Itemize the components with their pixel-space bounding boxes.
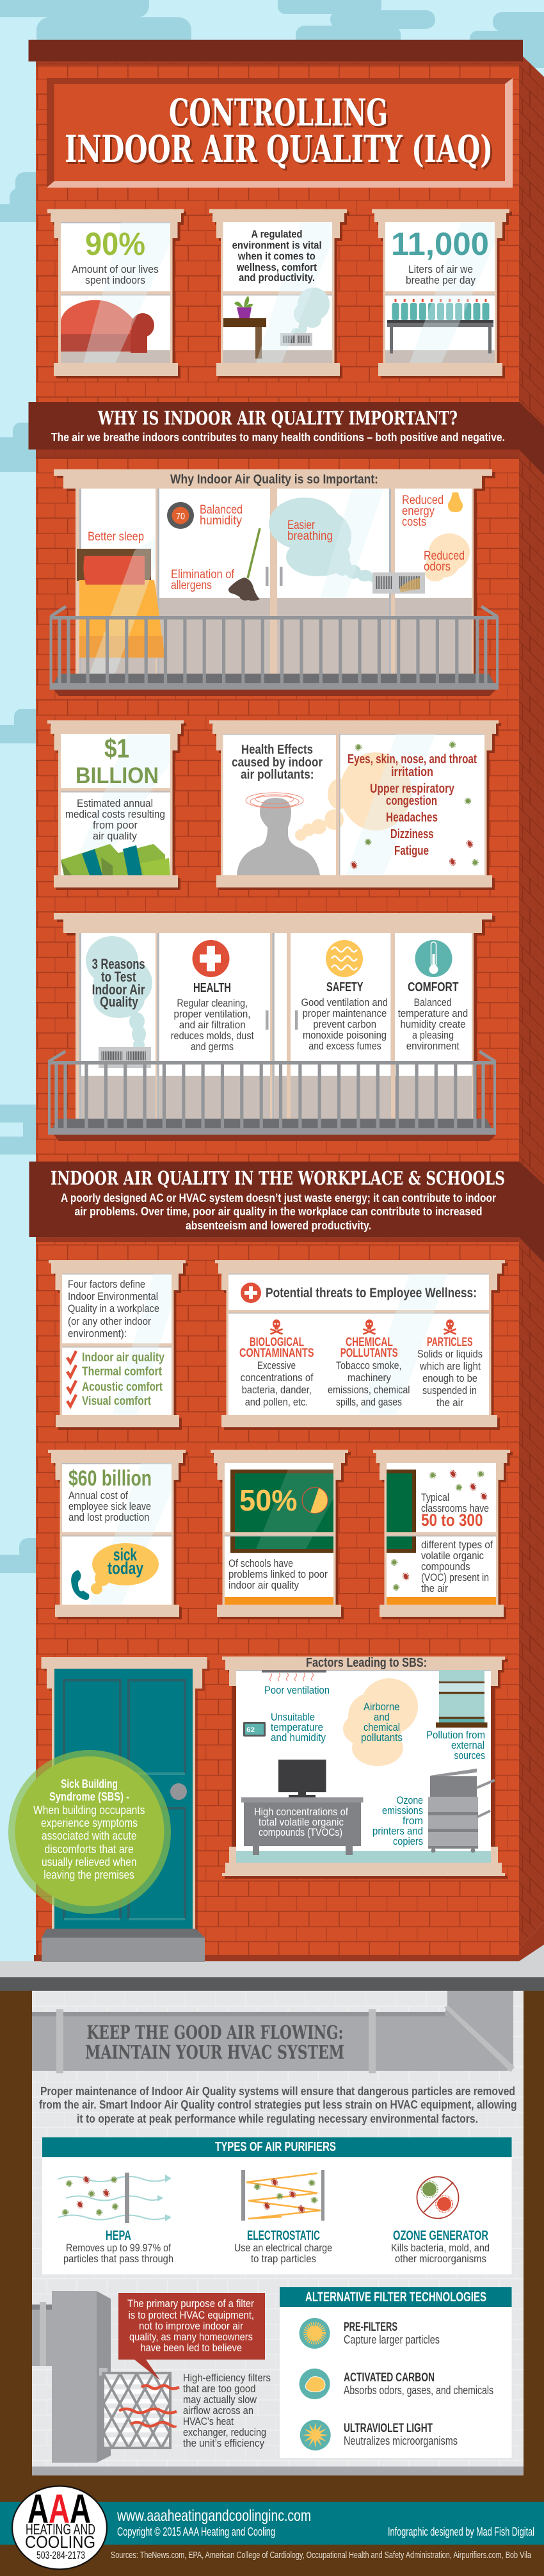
footer band [0, 2502, 544, 2545]
logo: AAA heating and cooling: HEATING AND [26, 2521, 95, 2538]
icon: vent [372, 572, 425, 594]
text: ozone emissions: emissions [382, 1804, 423, 1817]
column: safety: prevent carbon [313, 1018, 376, 1030]
icon: bottles on table [387, 299, 493, 353]
text: easier breathing: breathing [287, 530, 333, 543]
text: typical classrooms [421, 1491, 493, 1594]
website: www.aaaheatingandcoolinginc.com [116, 2507, 311, 2525]
item: pre-filters [300, 2318, 440, 2349]
text: amount of our lives: spent indoors [85, 274, 145, 286]
heading: MAINTAIN YOUR HVAC SYSTEM [85, 2041, 344, 2063]
heading: potential threats: Potential threats to Employee Wellness: [266, 1286, 477, 1300]
window: potential threats [215, 1260, 508, 1430]
item: pre-filters: PRE-FILTERS [344, 2321, 397, 2334]
text: four factors define: Quality in a workplace [68, 1302, 159, 1315]
column: biological contaminants: Excessive [257, 1359, 296, 1372]
text: annual cost [68, 1489, 151, 1523]
text: unsuitable temperature: temperature [271, 1721, 323, 1733]
text: four factors define [68, 1278, 159, 1340]
text: airborne pollutants [361, 1701, 403, 1744]
section banner: workplace and schools [29, 1162, 544, 1263]
panel: alternative filter technologies [280, 2287, 512, 2458]
text: ozone emissions [372, 1794, 423, 1847]
text: reduced energy costs: energy [402, 505, 435, 518]
window: factors leading to SBS [222, 1656, 508, 1879]
item: HEPA: Removes up to 99.97% of [66, 2242, 171, 2254]
text: unsuitable temperature: and humidity [271, 1731, 326, 1744]
icon: telephone [71, 1570, 89, 1600]
text: reduced energy costs [402, 494, 444, 529]
basement background [0, 1991, 544, 2576]
copyright: Copyright © 2015 AAA Heating and Cooling [117, 2525, 275, 2538]
icon: vent [280, 333, 312, 346]
text: regulated environment: environment is vital [232, 239, 322, 251]
text: of schools: problems linked to poor [228, 1568, 328, 1580]
item: HEPA: particles that pass through [63, 2253, 173, 2265]
column: safety: and excess fumes [308, 1040, 381, 1052]
panel: 3 reasons to test indoor air quality [54, 913, 495, 1121]
text: pollution from external sources: external [451, 1739, 484, 1751]
chart: half pie [302, 1487, 328, 1513]
column: comfort: temperature and [398, 1007, 468, 1019]
icon: bed [77, 549, 164, 658]
roof [28, 40, 523, 67]
text: amount of our lives: Amount of our lives [72, 263, 159, 275]
icon: window [436, 1670, 488, 1728]
text: typical classrooms: (VOC) present in [421, 1571, 489, 1584]
logo: AAA heating and cooling: 503-284-2173 [36, 2549, 85, 2561]
icon: electrostatic filter [241, 2170, 324, 2221]
door knob [170, 1783, 187, 1800]
item: HEPA: HEPA [106, 2228, 131, 2243]
text: airborne pollutants: chemical [364, 1721, 400, 1733]
window: $1 billion [47, 720, 186, 890]
icon: pollutant cloud [343, 1678, 418, 1766]
column: comfort: a pleasing [412, 1029, 454, 1041]
icon: carbon blob [300, 2369, 330, 2399]
text: amount of our lives [72, 263, 159, 286]
icon: potted plant on table [223, 296, 266, 359]
desk with TVOC text: compounds (TVOCs) [259, 1826, 342, 1838]
section banner: why is IAQ important [28, 402, 544, 475]
item: ultraviolet light: ULTRAVIOLET LIGHT [344, 2422, 433, 2435]
item: activated carbon: ACTIVATED CARBON [344, 2371, 435, 2385]
column: comfort: COMFORT [408, 980, 458, 994]
icon: thermometer [415, 940, 452, 977]
title sign [47, 78, 513, 188]
text: balanced humidity [200, 503, 243, 528]
text: regulated environment [232, 229, 322, 284]
text: easier breathing [287, 519, 333, 543]
column: biological contaminants [239, 1319, 314, 1408]
text: better sleep: Better sleep [88, 530, 144, 544]
panel: types of air purifiers [42, 2137, 512, 2274]
callout: purpose of a filter: have been led to believe [141, 2342, 242, 2354]
text: annual cost: employee sick leave [68, 1500, 151, 1512]
icon: speech bubble sick today [91, 1543, 159, 1594]
logo: AAA heating and cooling: AAA [28, 2486, 91, 2532]
icon: smoke from vent [86, 936, 152, 1051]
item: ozone generator: other microorganisms [395, 2253, 486, 2265]
text: four factors define: Four factors define [68, 1278, 145, 1290]
text: ozone emissions: Ozone [397, 1794, 423, 1806]
callout: purpose of a filter: quality, as many homeowners [129, 2331, 253, 2343]
item: electrostatic: to trap particles [251, 2253, 316, 2265]
list: symptoms: Eyes, skin, nose, and throat [348, 752, 477, 766]
column: safety: Good ventilation and [301, 996, 388, 1009]
text: unsuitable temperature: Unsuitable [271, 1711, 315, 1723]
stat: $1 billion: $1 [104, 733, 129, 763]
column: particles: suspended in [422, 1384, 477, 1397]
callout: sick building syndrome: Sick Building [61, 1778, 118, 1790]
heading: TYPES OF AIR PURIFIERS [215, 2140, 336, 2154]
heading: 3 reasons: 3 Reasons [92, 956, 145, 972]
icon: stacks of money [61, 844, 170, 875]
checklist: Visual comfort [82, 1395, 152, 1408]
list: symptoms: Upper respiratory [370, 782, 455, 796]
checklist: Acoustic comfort [82, 1381, 163, 1394]
column: comfort: Balanced [414, 996, 452, 1009]
checklist [67, 1351, 164, 1408]
stat: 50 to 300: 50 to 300 [421, 1511, 483, 1530]
text: typical classrooms: different types of [421, 1539, 493, 1551]
description: absenteeism and lowered productivity. [186, 1219, 371, 1232]
icon: air filter [103, 2373, 170, 2448]
sidewalk [0, 1938, 544, 1991]
column: health: reduces molds, dust [171, 1030, 254, 1042]
desk with TVOC text [241, 1797, 364, 1855]
text: elimination of allergens: Elimination of [171, 568, 235, 581]
text: regulated environment: wellness, comfort [236, 262, 317, 273]
balcony railing 2 [48, 1051, 496, 1141]
icon: odor cloud [399, 533, 470, 592]
stat: $60 billion: $60 billion [68, 1466, 152, 1491]
text: of schools [228, 1557, 328, 1591]
sky background [0, 0, 544, 1962]
item: electrostatic: ELECTROSTATIC [247, 2228, 320, 2243]
item: ultraviolet light [300, 2420, 458, 2450]
column: chemical pollutants: machinery [348, 1372, 391, 1384]
text: pollution from external sources: sources [454, 1749, 485, 1762]
column: biological contaminants: bacteria, dander, [242, 1384, 312, 1396]
item: pre-filters: Capture larger particles [344, 2333, 440, 2346]
text: annual cost: Annual cost of [68, 1489, 128, 1502]
text: annual cost: and lost production [68, 1511, 150, 1523]
text: proper maintenance paragraph [39, 2084, 517, 2125]
item: activated carbon [300, 2369, 493, 2399]
text: reduced energy costs: costs [402, 515, 426, 529]
text: reduced odors [424, 549, 465, 574]
text: reduced odors: Reduced [424, 549, 465, 563]
icon: copier [428, 1769, 495, 1853]
column: particles [417, 1319, 483, 1409]
text: high-efficiency filters: airflow across an [183, 2404, 253, 2417]
text: reduced energy costs: Reduced [402, 494, 444, 507]
column: health: Regular cleaning, [177, 997, 248, 1009]
item: ozone generator: OZONE GENERATOR [393, 2228, 488, 2243]
desk with TVOC text: total volatile organic [259, 1816, 344, 1828]
item: ozone generator: Kills bacteria, mold, and [391, 2242, 490, 2254]
text: typical classrooms: compounds [421, 1560, 470, 1573]
text: typical classrooms: classrooms have [421, 1502, 489, 1514]
text: typical classrooms: Typical [421, 1491, 449, 1503]
icon: UV sun [300, 2420, 331, 2450]
germs [350, 741, 478, 870]
icon: medical cross [192, 940, 229, 977]
column: biological contaminants: and pollen, etc. [245, 1396, 308, 1408]
text: regulated environment: when it comes to [237, 251, 316, 263]
text: four factors define: Indoor Environmental [68, 1290, 158, 1302]
column: safety [301, 940, 388, 1052]
text: estimated annual medical costs [65, 797, 165, 842]
callout: sick building syndrome: Syndrome (SBS) - [49, 1790, 129, 1803]
text: reduced odors: odors [424, 560, 451, 574]
text: ozone emissions: printers and [372, 1825, 423, 1837]
checklist: Indoor air quality [82, 1351, 164, 1365]
column: comfort [398, 940, 468, 1052]
icon: vent [99, 1047, 151, 1068]
column: health: and air filtration [179, 1019, 246, 1031]
list: symptoms: Dizziness [390, 827, 434, 841]
text: pollution from external sources [426, 1729, 485, 1762]
column: health: and germs [191, 1041, 234, 1053]
icon: speech bubble sick today: sick [113, 1545, 138, 1564]
window: 50% of schools [211, 1450, 351, 1619]
window: regulated environment [209, 209, 349, 378]
list: symptoms: congestion [386, 794, 437, 808]
balcony railing 1 [50, 606, 499, 696]
window: 11,000 liters [372, 209, 512, 378]
column: chemical pollutants: spills, and gases [336, 1396, 402, 1408]
icon: pollutant cloud [295, 752, 412, 841]
building front brick wall [36, 58, 519, 1957]
heading: Factors Leading to SBS: [306, 1656, 427, 1670]
germs [391, 1470, 488, 1591]
building side wall [519, 56, 544, 1948]
heading: health effects: Health Effects [241, 743, 313, 757]
heading: 3 reasons: Quality [100, 994, 139, 1010]
icon: no germs [417, 2177, 458, 2218]
column: biological contaminants: CONTAMINANTS [239, 1347, 314, 1360]
callout: purpose of a filter: The primary purpose of a filter [127, 2297, 254, 2310]
heading: 3 reasons: Indoor Air [92, 982, 145, 998]
icon: thermostat 62 [243, 1722, 266, 1737]
icon: thermostat 62: 62 [246, 1726, 255, 1734]
column: safety: proper maintenance [303, 1007, 387, 1019]
heading: health effects [232, 743, 323, 782]
callout: sick building syndrome: discomforts that are [44, 1843, 134, 1856]
heading: KEEP THE GOOD AIR FLOWING: [87, 2021, 343, 2043]
column: particles: the air [436, 1397, 463, 1409]
icon: smoke from vent [291, 288, 330, 338]
window: typical classrooms [373, 1450, 513, 1619]
icon: speech bubble sick today: today [108, 1559, 143, 1578]
column: particles: PARTICLES [427, 1336, 472, 1349]
text: elimination of allergens: allergens [171, 579, 212, 592]
text: high-efficiency filters: HVAC’s heat [183, 2415, 234, 2427]
stat: 90%: 90% [85, 226, 145, 262]
text: high-efficiency filters: may actually slow [183, 2394, 257, 2406]
door handles [266, 567, 269, 586]
text: four factors define: environment): [68, 1327, 127, 1340]
text: airborne pollutants: pollutants [361, 1731, 403, 1744]
callout: sick building syndrome: associated with acute [42, 1829, 137, 1842]
callout: sick building syndrome: usually relieved when [42, 1856, 137, 1868]
stat: 11,000: 11,000 [391, 226, 489, 262]
list: symptoms [348, 752, 477, 858]
callout: sick building syndrome [8, 1750, 171, 1914]
panel: why IAQ is so important window and balcony [54, 469, 495, 676]
duct with heading [32, 1991, 515, 2073]
text: airborne pollutants: and [374, 1711, 390, 1723]
icon: pre-filter burst [300, 2318, 330, 2349]
icon: HEPA filter [58, 2173, 172, 2223]
logo: AAA heating and cooling: COOLING [25, 2532, 95, 2552]
column: comfort: environment [406, 1040, 460, 1052]
logo: AAA heating and cooling [12, 2486, 107, 2569]
text: high-efficiency filters: exchanger, reducing [183, 2426, 266, 2438]
column: chemical pollutants: Tobacco smoke, [336, 1359, 402, 1372]
text: liters per day: Liters of air we [408, 263, 473, 275]
column: health [171, 940, 254, 1053]
text: typical classrooms: the air [421, 1582, 448, 1594]
item: ultraviolet light: Neutralizes microorganisms [344, 2434, 458, 2447]
illustration: HVAC unit and filter [32, 2291, 179, 2463]
text: unsuitable temperature [271, 1711, 326, 1744]
heading: 3 reasons: to Test [101, 969, 136, 985]
icon: computer monitor [278, 1760, 326, 1798]
clouds [0, 0, 544, 1573]
text: proper maintenance paragraph: it to operate at peak performance while regulating necessary environmental factors. [77, 2112, 478, 2125]
desk with TVOC text: High concentrations of [254, 1806, 348, 1818]
list: symptoms: Fatigue [394, 844, 429, 858]
text: estimated annual medical costs: from poor [93, 819, 138, 831]
door handles [266, 1010, 269, 1030]
icon: gas waves [326, 940, 363, 977]
door step and base band [34, 1922, 544, 1962]
column: comfort: humidity create [401, 1018, 466, 1030]
column: particles: Solids or liquids [417, 1348, 483, 1360]
window: health effects [209, 720, 501, 890]
text: high-efficiency filters: that are too good [183, 2383, 256, 2395]
icon: ceiling vent [262, 1670, 326, 1681]
text: liters per day [406, 263, 476, 286]
callout: purpose of a filter: not to improve indoor air [139, 2320, 243, 2332]
column: health: proper ventilation, [174, 1008, 251, 1020]
column: biological contaminants: BIOLOGICAL [250, 1336, 304, 1349]
stat: $1 billion: BILLION [76, 763, 159, 788]
text: easier breathing: Easier [287, 519, 316, 532]
description [61, 1191, 496, 1232]
icon: person silhouette with dizzy rings [237, 793, 320, 875]
icon: feather duster [228, 528, 260, 601]
text: balanced humidity: humidity [200, 514, 242, 528]
icon: thermostat 70: 70 [176, 511, 185, 522]
icon: clean air cloud [269, 498, 381, 583]
text: of schools: Of schools have [228, 1557, 293, 1569]
column: chemical pollutants: CHEMICAL [346, 1336, 393, 1349]
window: $60 billion [48, 1450, 188, 1619]
callout: sick building syndrome: leaving the premises [44, 1868, 134, 1881]
text: high-efficiency filters [183, 2372, 271, 2449]
window: 90% of our lives [47, 209, 186, 378]
item: electrostatic [234, 2170, 332, 2265]
text: regulated environment: and productivity. [239, 272, 315, 284]
text: high-efficiency filters: High-efficiency filters [183, 2372, 271, 2384]
heading: Why Indoor Air Quality is so Important: [170, 473, 378, 487]
stat: 50%: 50% [239, 1484, 297, 1517]
text: estimated annual medical costs: air quality [93, 830, 137, 842]
heading [85, 2021, 344, 2063]
heading: 3 reasons [92, 956, 145, 1010]
icon: restricted airflow [119, 2386, 179, 2427]
front door [41, 1657, 210, 1931]
text: ozone emissions: from [403, 1815, 423, 1827]
text: elimination of allergens [171, 568, 235, 592]
icon: medical cross [241, 1283, 261, 1303]
callout: purpose of a filter [118, 2293, 265, 2380]
stat: $1 billion [76, 733, 159, 788]
chalkboard [387, 1470, 416, 1553]
callout: sick building syndrome: experience symptoms [41, 1817, 138, 1829]
window: four factors [49, 1260, 188, 1430]
item: HEPA [58, 2173, 173, 2265]
column: chemical pollutants [328, 1319, 410, 1408]
icon: light bulb [448, 492, 463, 512]
column: chemical pollutants: emissions, chemical [328, 1384, 410, 1396]
title text: CONTROLLING [169, 91, 388, 134]
column: chemical pollutants: POLLUTANTS [340, 1347, 398, 1360]
text: four factors define: (or any other indoor [68, 1315, 151, 1327]
callout: sick building syndrome: When building occupants [33, 1804, 145, 1817]
title text [65, 91, 493, 171]
icon: couch [61, 300, 154, 353]
text: balanced humidity: Balanced [200, 503, 243, 517]
text: of schools: indoor air quality [228, 1579, 299, 1591]
column: safety: SAFETY [326, 980, 364, 994]
text: estimated annual medical costs: Estimated annual [77, 797, 153, 809]
item: ozone generator [391, 2177, 490, 2265]
text: pollution from external sources: Pollution from [426, 1729, 485, 1741]
text: poor ventilation: Poor ventilation [264, 1684, 330, 1696]
callout: purpose of a filter: is to protect HVAC equipment, [128, 2309, 254, 2321]
description: air problems. Over time, poor air quality in the workplace can contribute to increased [74, 1204, 483, 1218]
text: high-efficiency filters: the unit’s efficiency [183, 2437, 264, 2449]
column: safety: monoxide poisoning [303, 1029, 387, 1041]
heading: health effects: caused by indoor [232, 756, 323, 770]
item: activated carbon: Absorbs odors, gases, and chemicals [344, 2384, 493, 2397]
text: typical classrooms: volatile organic [421, 1550, 484, 1562]
checklist: Thermal comfort [82, 1365, 163, 1379]
column: particles: enough to be [422, 1372, 477, 1384]
list: symptoms: irritation [391, 765, 433, 779]
heading: health effects: air pollutants: [241, 768, 314, 782]
item: electrostatic: Use an electrical charge [234, 2242, 332, 2254]
chalkboard [230, 1470, 333, 1553]
text: estimated annual medical costs: medical costs resulting [65, 808, 165, 820]
column: biological contaminants: concentrations of [241, 1372, 314, 1384]
text: airborne pollutants: Airborne [364, 1701, 399, 1713]
text: regulated environment: A regulated [251, 229, 302, 240]
icon: thermostat 70 [167, 502, 194, 529]
list: symptoms: Headaches [386, 811, 438, 825]
text: ozone emissions: copiers [393, 1835, 423, 1847]
door panels [64, 1680, 185, 1919]
column: health: HEALTH [193, 981, 231, 995]
text: liters per day: breathe per day [406, 274, 476, 286]
column: particles: which are light [419, 1360, 481, 1372]
